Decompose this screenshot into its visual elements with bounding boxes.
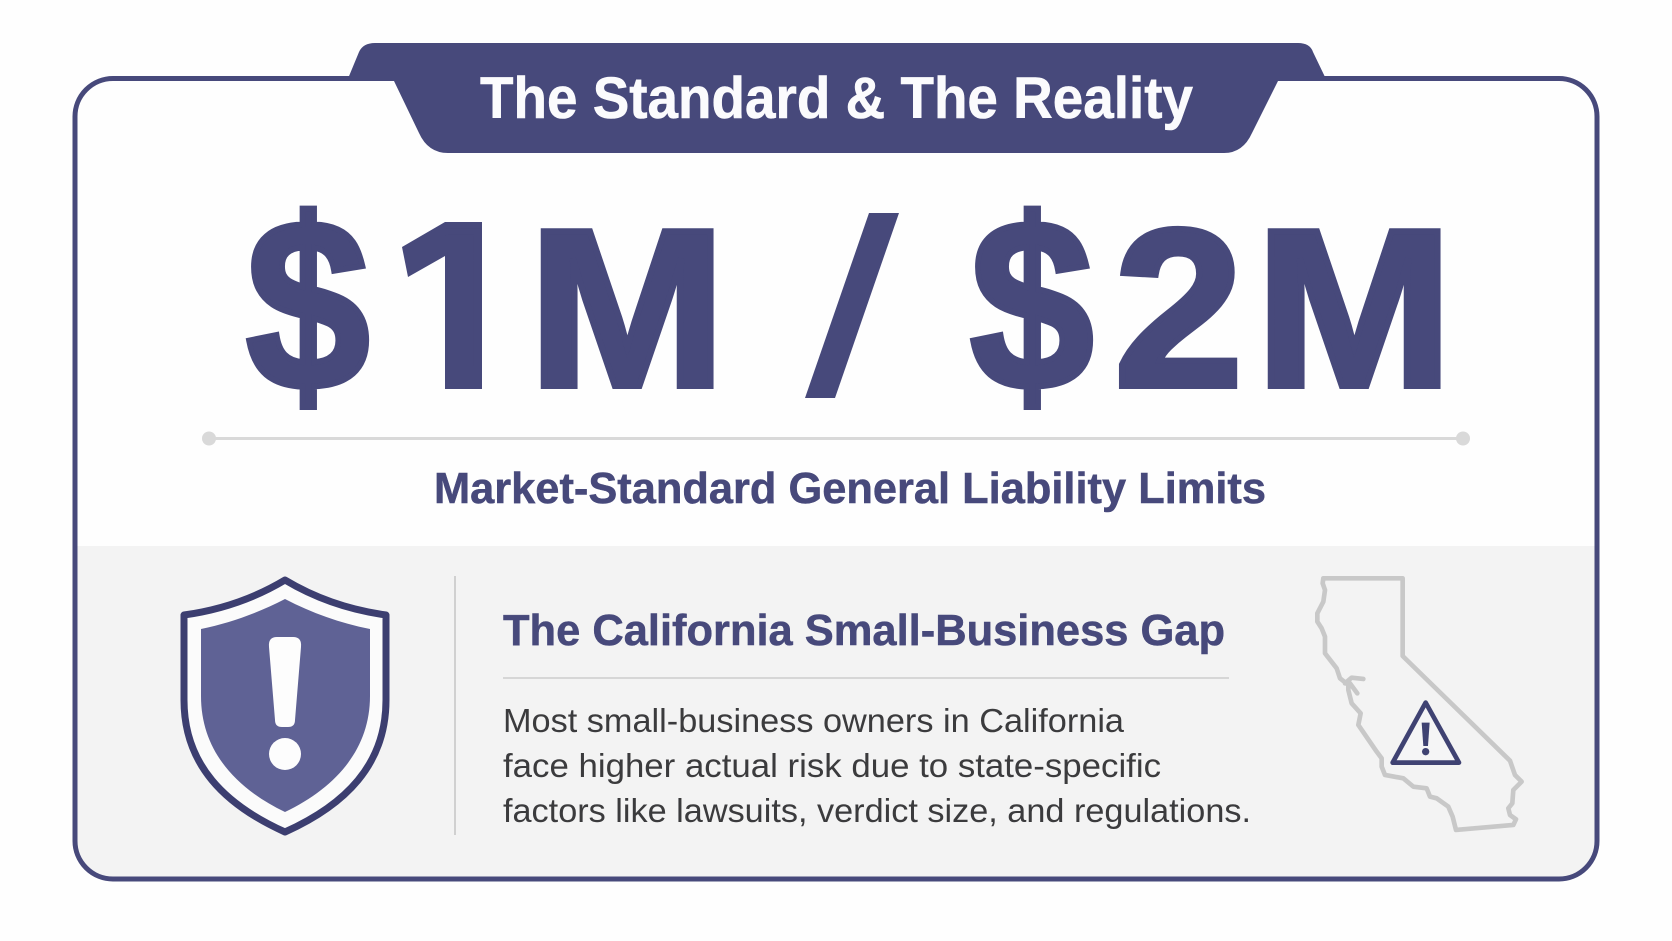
body text: face higher actual risk due to state-specific — [503, 747, 1161, 784]
panel: main card — [75, 78, 1597, 879]
warning dot — [1422, 748, 1429, 755]
digit 1 glyph: 1 — [390, 182, 521, 434]
figure: slash — [805, 213, 899, 398]
icon: shield with exclamation — [184, 580, 386, 832]
panel: grey lower band — [75, 546, 1597, 879]
figure: second M: M — [1255, 183, 1453, 435]
figure: second dollar sign: $ — [970, 170, 1094, 441]
tab shape — [347, 43, 1325, 153]
icon: California map with warning — [1317, 578, 1522, 830]
card outline — [75, 78, 1597, 879]
shield outer — [184, 580, 386, 832]
exclamation mark — [269, 637, 301, 727]
state outline — [1317, 578, 1522, 830]
body text — [503, 702, 1251, 829]
heading tab — [347, 43, 1325, 153]
exclamation dot — [269, 738, 301, 770]
vertical divider — [454, 576, 456, 835]
figure: first dollar sign: $ — [246, 170, 370, 441]
shield inner — [201, 599, 370, 812]
subtitle: Market-Standard General Liability Limits — [434, 464, 1266, 513]
digit 1 shape — [402, 222, 482, 389]
big limits figure — [246, 206, 1441, 410]
figure: digit 1 — [402, 222, 482, 389]
warning triangle — [1393, 703, 1459, 763]
heading rule — [503, 677, 1229, 679]
body text: Most small-business owners in California — [503, 702, 1125, 739]
section heading: The California Small-Business Gap — [503, 606, 1225, 655]
body text: factors like lawsuits, verdict size, and regulations. — [503, 792, 1251, 829]
figure: first M: M — [528, 183, 726, 435]
warning exclamation — [1422, 723, 1430, 746]
title: The Standard & The Reality — [480, 66, 1193, 131]
figure: digit 2: 2 — [1114, 183, 1243, 434]
divider with end dots — [202, 432, 1470, 446]
